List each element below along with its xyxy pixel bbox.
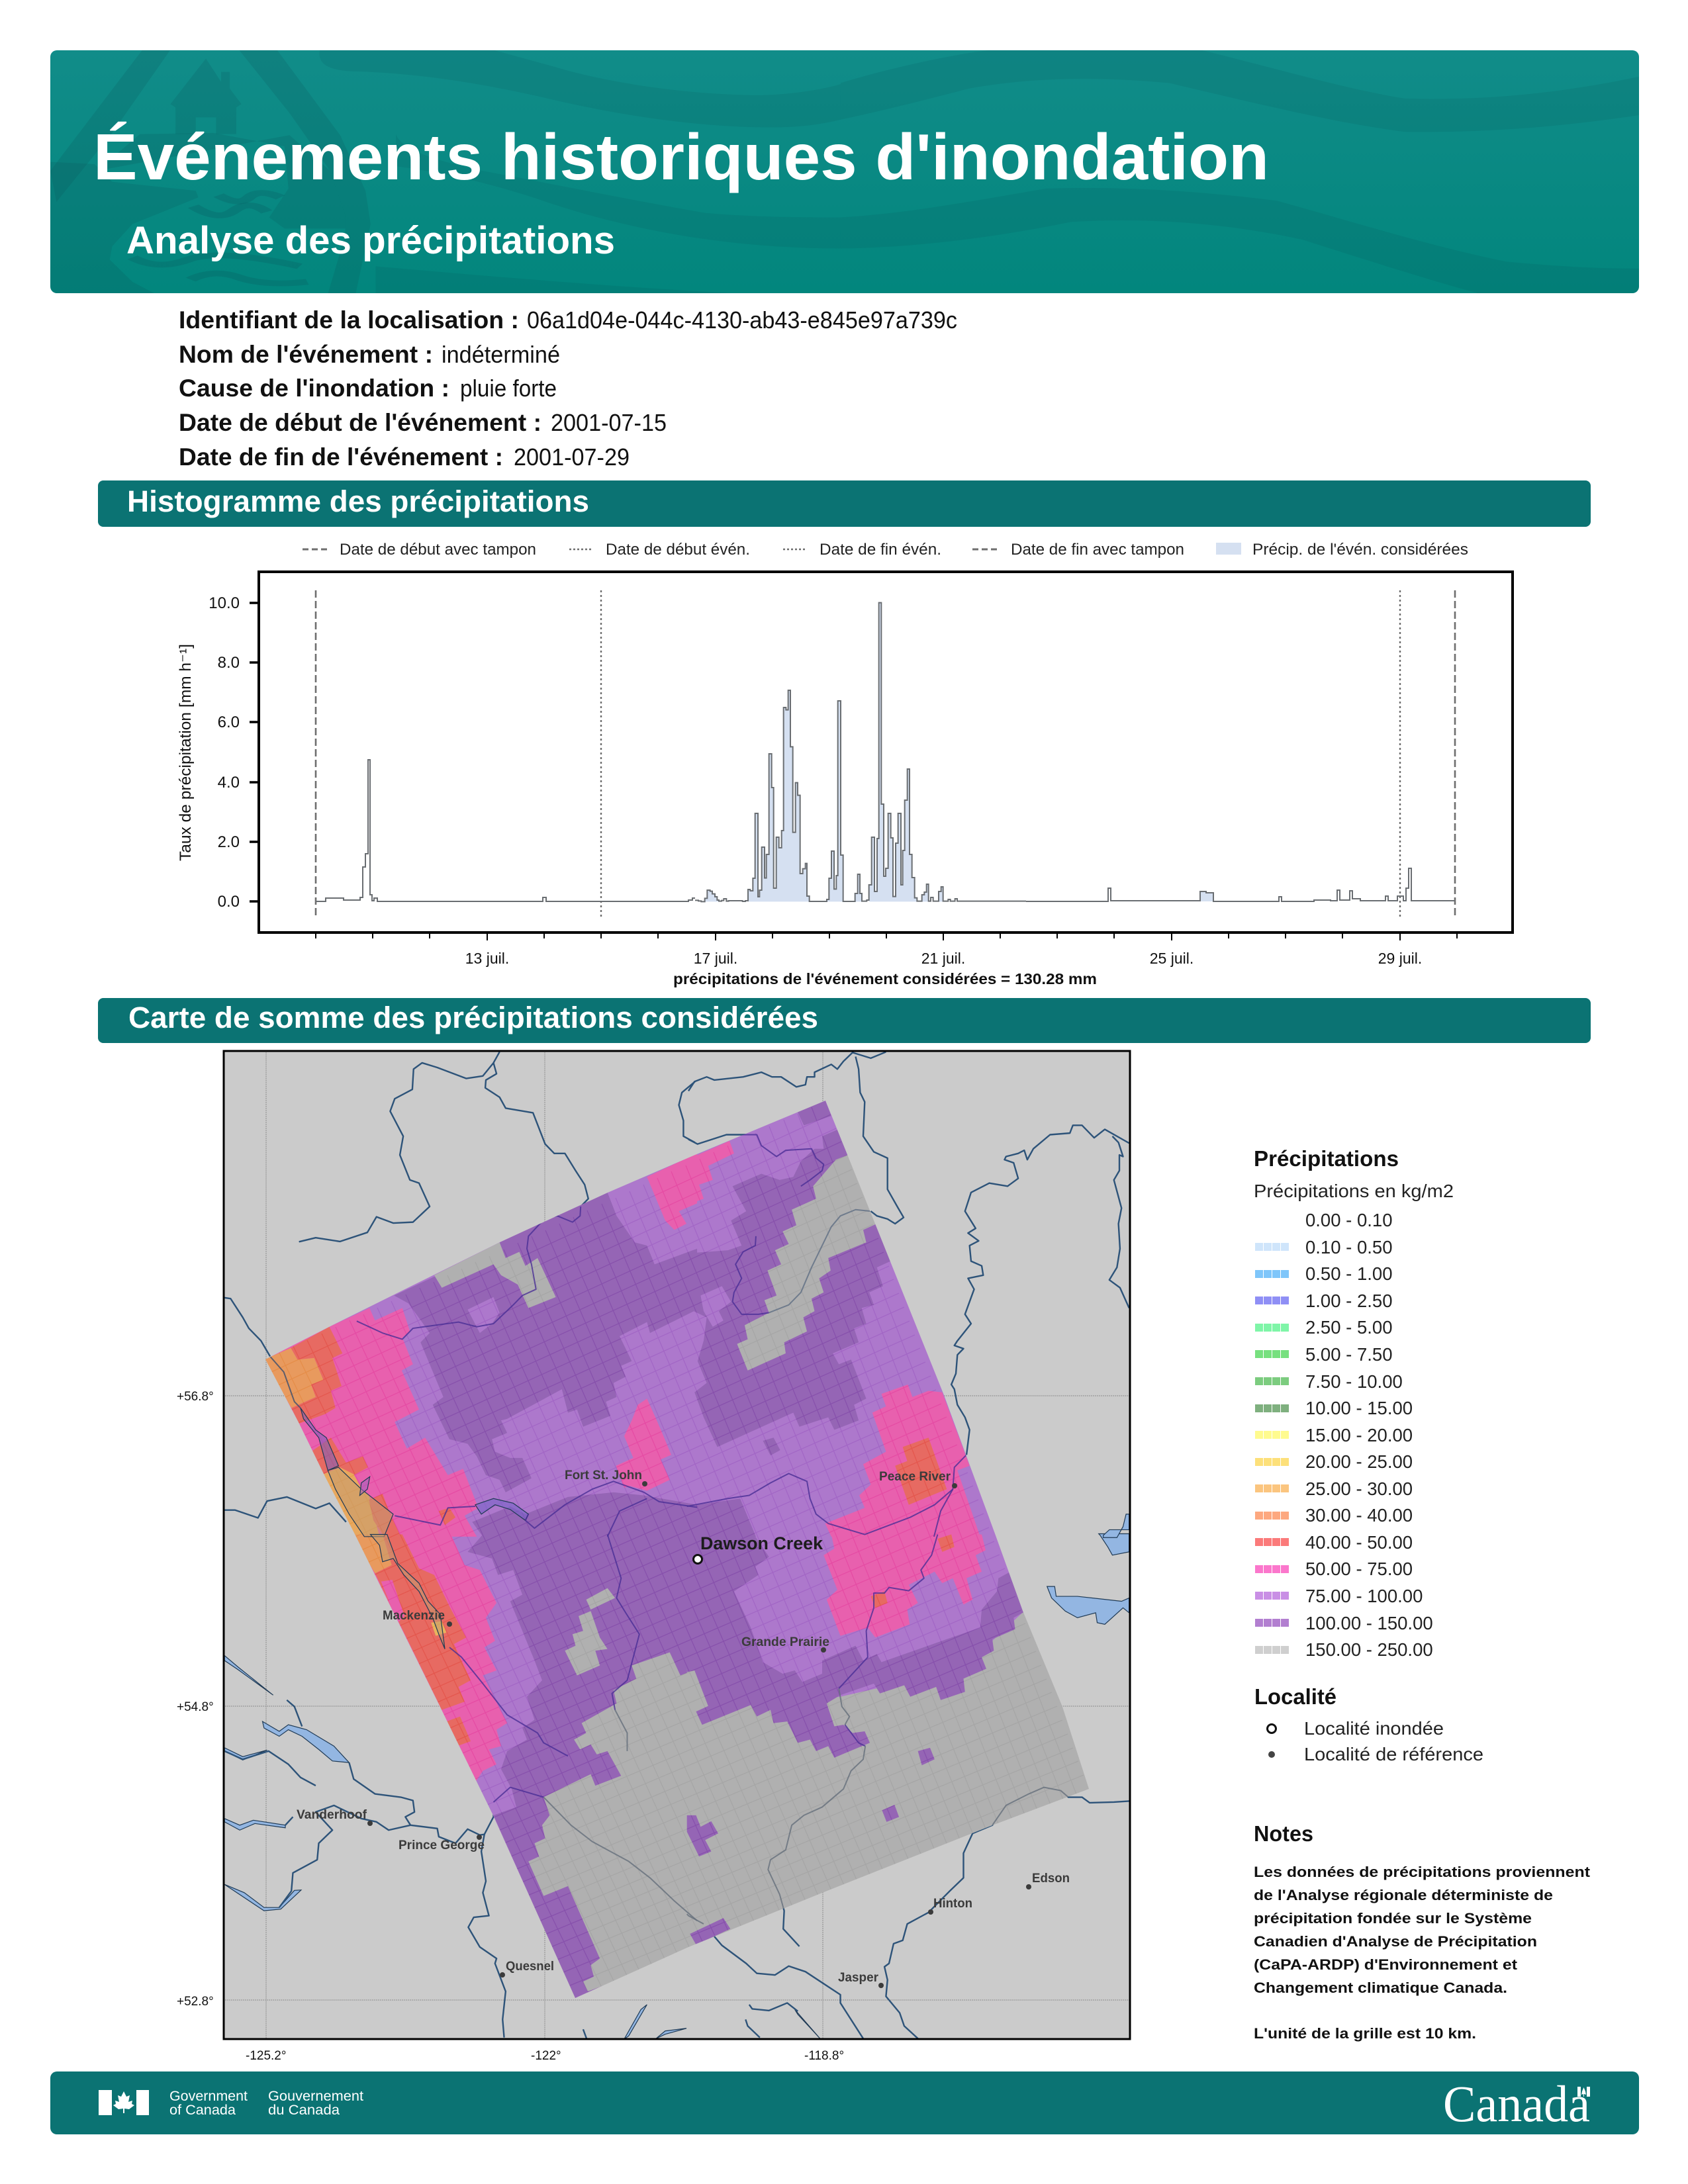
y axis ticks and labels: 8.0 [218, 654, 240, 672]
city: Jasper: Jasper [838, 1970, 878, 1985]
map precipitation grid [252, 1085, 1105, 2012]
legend rows: 10.00 - 15.00 [1305, 1398, 1413, 1418]
map legend: locality [1254, 1684, 1483, 1764]
reference locality label: Localité de référence [1304, 1744, 1483, 1764]
map coordinate labels: +52.8° [177, 1995, 214, 2009]
y axis ticks and labels: 0.0 [218, 893, 240, 911]
flood cause: Cause de l'inondation : [179, 375, 449, 402]
reference locality symbol [1268, 1751, 1275, 1758]
city: Peace River: Peace River [879, 1469, 951, 1484]
legend rows: 75.00 - 100.00 [1305, 1586, 1423, 1606]
notes text: (CaPA-ARDP) d'Environnement et [1254, 1956, 1518, 1973]
chart frame [259, 572, 1513, 933]
city: Vanderhoof: Vanderhoof [297, 1807, 367, 1822]
flooded locality: Dawson Creek [694, 1533, 823, 1563]
government wordmark French: du Canada [268, 2103, 340, 2118]
notes text: Les données de précipitations proviennent [1254, 1864, 1591, 1880]
government wordmark English [169, 2089, 248, 2118]
cells north-east [687, 1101, 980, 1537]
city: Hinton: Hinton [933, 1896, 972, 1911]
y axis title: Taux de précipitation [mm h⁻¹] [177, 644, 195, 861]
map coordinate labels: -122° [531, 2049, 561, 2063]
city labels [297, 1468, 1070, 1988]
x axis ticks and labels: 17 juil. [694, 950, 737, 967]
x axis ticks and labels: 29 juil. [1378, 950, 1422, 967]
legend rows: 15.00 - 20.00 [1305, 1425, 1413, 1445]
header banner [50, 50, 1646, 296]
footer banner [50, 2071, 1639, 2134]
section heading: map [98, 998, 1591, 1043]
notes text: L'unité de la grille est 10 km. [1254, 2025, 1476, 2042]
x axis ticks and labels [316, 933, 1457, 967]
location id [179, 306, 957, 334]
notes text: Canadien d'Analyse de Précipitation [1254, 1933, 1537, 1950]
event name [179, 341, 560, 368]
map coordinate labels: -118.8° [804, 2049, 844, 2063]
end date: Date de fin de l'événement : [179, 443, 503, 471]
location id: 06a1d04e-044c-4130-ab43-e845e97a739c [527, 306, 957, 334]
legend rows: 25.00 - 30.00 [1305, 1479, 1413, 1499]
cells south-east [687, 1535, 1096, 1954]
chart legend: Précip. de l'évén. considérées [1252, 541, 1468, 559]
legend rows: 40.00 - 50.00 [1305, 1532, 1413, 1553]
legend rows [1255, 1210, 1433, 1660]
map coordinate labels [177, 1390, 844, 2063]
Canada wordmark: Canada [1443, 2075, 1590, 2132]
event name: indéterminé [442, 341, 560, 368]
y axis ticks and labels: 6.0 [218, 713, 240, 731]
map graticule [225, 1052, 1129, 2038]
government wordmark French: Gouvernement [268, 2089, 363, 2104]
map legend: precipitation [1254, 1146, 1454, 1660]
header logo: house and river [50, 50, 371, 295]
header wave decoration [320, 50, 1646, 296]
legend rows: 20.00 - 25.00 [1305, 1451, 1413, 1472]
map coordinate labels: +54.8° [177, 1700, 214, 1714]
chart legend [303, 541, 1468, 559]
legend rows: 0.00 - 0.10 [1305, 1210, 1392, 1230]
legend rows: 100.00 - 150.00 [1305, 1613, 1433, 1633]
legend rows: 50.00 - 75.00 [1305, 1559, 1413, 1579]
rivers and lakes crossing the grid [270, 1134, 1068, 1924]
subtitle: Analyse des précipitations [126, 219, 615, 262]
notes text: de l'Analyse régionale déterministe de [1254, 1887, 1553, 1903]
grid lines [271, 1107, 1084, 1993]
grid cells: light purple base [312, 1101, 1022, 1925]
map background [224, 1051, 1130, 2039]
flooded locality symbol [1267, 1725, 1276, 1733]
legend subtitle: Précipitations en kg/m2 [1254, 1181, 1454, 1201]
y axis ticks and labels [209, 594, 258, 911]
section heading: histogram: Histogramme des précipitations [127, 484, 589, 518]
locality heading: Localité [1254, 1684, 1336, 1709]
city: Hinton [928, 1896, 972, 1915]
end date: 2001-07-29 [514, 443, 630, 471]
start date: Date de début de l'événement : [179, 409, 541, 436]
x axis ticks and labels: 13 juil. [465, 950, 509, 967]
y axis ticks and labels: 10.0 [209, 594, 240, 612]
lakes and rivers outside the grid [224, 1052, 1129, 2039]
city: Fort St. John: Fort St. John [565, 1468, 642, 1482]
icon: Canadian flag [99, 2090, 149, 2115]
map coordinate labels: +56.8° [177, 1390, 214, 1404]
notes [1254, 1821, 1591, 2042]
cells north-west [264, 1154, 697, 1537]
city: Grande Prairie: Grande Prairie [741, 1635, 829, 1649]
legend heading: Précipitations [1254, 1146, 1399, 1171]
notes text [1254, 1864, 1591, 2042]
y axis ticks and labels: 2.0 [218, 833, 240, 851]
section heading: map: Carte de somme des précipitations considérées [128, 1001, 818, 1034]
legend rows: 0.10 - 0.50 [1305, 1237, 1392, 1257]
event details [179, 306, 957, 471]
x axis ticks and labels: 25 juil. [1150, 950, 1194, 967]
notes text: Changement climatique Canada. [1254, 1979, 1507, 1996]
start date: 2001-07-15 [551, 409, 667, 436]
chart legend: Date de début évén. [606, 541, 750, 559]
city: Mackenzie: Mackenzie [383, 1608, 445, 1623]
legend rows: 2.50 - 5.00 [1305, 1317, 1392, 1338]
cells south-west [352, 1535, 697, 1999]
main title: Événements historiques d'inondation [93, 120, 1269, 193]
considered precipitation fill [705, 603, 1213, 901]
notes text: précipitation fondée sur le Système [1254, 1910, 1532, 1927]
government wordmark English: Government [169, 2089, 248, 2104]
section heading: histogram [98, 480, 1591, 527]
map frame [224, 1051, 1130, 2039]
city: Quesnel: Quesnel [506, 1959, 554, 1974]
legend rows: 0.50 - 1.00 [1305, 1263, 1392, 1284]
city: Edson [1026, 1871, 1070, 1889]
city: Edson: Edson [1032, 1871, 1070, 1886]
event name: Nom de l'événement : [179, 341, 433, 368]
government wordmark French [268, 2089, 363, 2118]
x axis ticks and labels: 21 juil. [921, 950, 965, 967]
y axis ticks and labels: 4.0 [218, 774, 240, 792]
city: Prince George: Prince George [399, 1838, 485, 1852]
flood cause: pluie forte [460, 375, 557, 402]
panel: precipitation histogram [177, 541, 1513, 987]
chart legend: Date de fin évén. [820, 541, 941, 559]
legend rows: 7.50 - 10.00 [1305, 1371, 1403, 1392]
flooded locality: Dawson Creek: Dawson Creek [700, 1533, 823, 1553]
total precipitation caption: précipitations de l'événement considérées = 130.28 mm [673, 970, 1097, 987]
location id: Identifiant de la localisation : [179, 306, 519, 334]
legend rows: 5.00 - 7.50 [1305, 1344, 1392, 1365]
legend rows: 30.00 - 40.00 [1305, 1505, 1413, 1525]
chart legend: Date de début avec tampon [340, 541, 536, 559]
city: Quesnel [500, 1959, 554, 1978]
legend rows: 1.00 - 2.50 [1305, 1291, 1392, 1311]
event date markers [316, 590, 1455, 917]
chart legend: Date de fin avec tampon [1011, 541, 1184, 559]
precipitation rate line [316, 603, 1455, 901]
map coordinate labels: -125.2° [246, 2049, 286, 2063]
panel: precipitation map [177, 1051, 1130, 2063]
legend rows: 150.00 - 250.00 [1305, 1639, 1433, 1660]
notes heading: Notes [1254, 1821, 1313, 1846]
government wordmark English: of Canada [169, 2103, 236, 2118]
flooded locality label: Localité inondée [1304, 1718, 1444, 1739]
